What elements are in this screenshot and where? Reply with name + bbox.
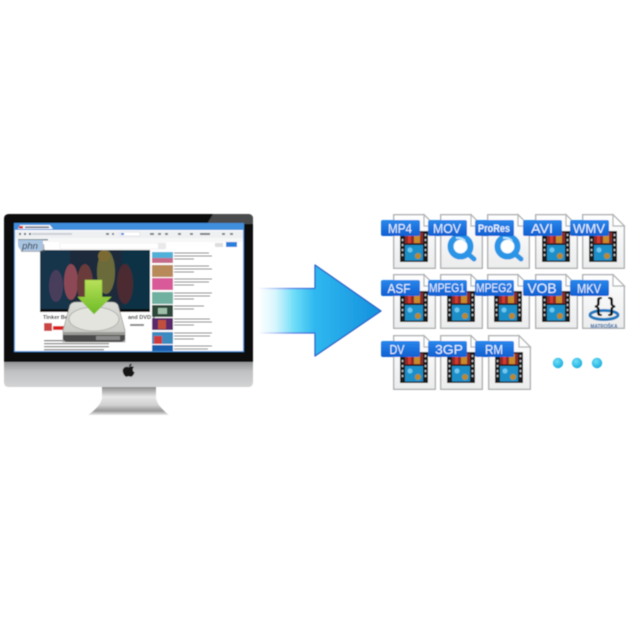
- apple logo: [123, 364, 135, 377]
- file: VOB: VOB: [528, 280, 556, 296]
- related video list: [152, 252, 212, 351]
- file: AVI: AVI: [531, 221, 553, 236]
- file: MPEG2: [475, 275, 529, 328]
- phn logo badge: phn: [21, 241, 38, 252]
- file: MKV: MKV: [577, 281, 601, 296]
- file: ASF: ASF: [388, 281, 411, 296]
- file: WMV: WMV: [573, 221, 605, 236]
- video frame: [40, 250, 150, 312]
- file: MOV: [428, 215, 482, 268]
- phn logo badge: [18, 240, 45, 252]
- browser screen: and DVD 2: [128, 315, 156, 321]
- file: RM: RM: [485, 342, 503, 357]
- file: MP4: MP4: [388, 221, 412, 236]
- monitor stand: [88, 387, 169, 415]
- file: RM: [475, 336, 530, 389]
- file: DV: DV: [390, 342, 405, 357]
- format file icons: [381, 215, 624, 389]
- file: ProRes: [475, 215, 529, 268]
- monitor illustration: [4, 214, 253, 415]
- browser tab: [18, 225, 53, 229]
- file: AVI: [523, 215, 577, 268]
- file: ProRes: ProRes: [478, 223, 510, 235]
- video title: Tinker Bell & The: [43, 315, 88, 321]
- file: MPEG2: MPEG2: [476, 281, 512, 295]
- browser screen: [14, 223, 244, 352]
- file: 3GP: 3GP: [435, 342, 463, 357]
- Matroska logo: { }: [594, 295, 616, 317]
- file: MPEG1: [428, 275, 482, 328]
- search bar: [60, 243, 164, 249]
- file: 3GP: [428, 336, 482, 389]
- monitor bezel: [4, 214, 253, 362]
- green down arrow: [78, 280, 111, 314]
- file: VOB: [523, 275, 577, 328]
- file: MP4: [381, 215, 435, 268]
- ellipsis dots: [553, 358, 602, 368]
- file: MOV: MOV: [433, 221, 461, 236]
- Matroska logo: MATROŠKA: [590, 322, 618, 330]
- Matroska logo: [590, 295, 618, 330]
- file: ASF: [381, 275, 435, 328]
- download disk icon: [63, 280, 125, 342]
- file: MPEG1: MPEG1: [429, 281, 465, 295]
- file: MKV: [570, 275, 624, 330]
- big blue arrow: [258, 265, 381, 356]
- monitor chin: [4, 361, 253, 387]
- file: DV: [381, 336, 435, 389]
- file: WMV: [570, 215, 624, 268]
